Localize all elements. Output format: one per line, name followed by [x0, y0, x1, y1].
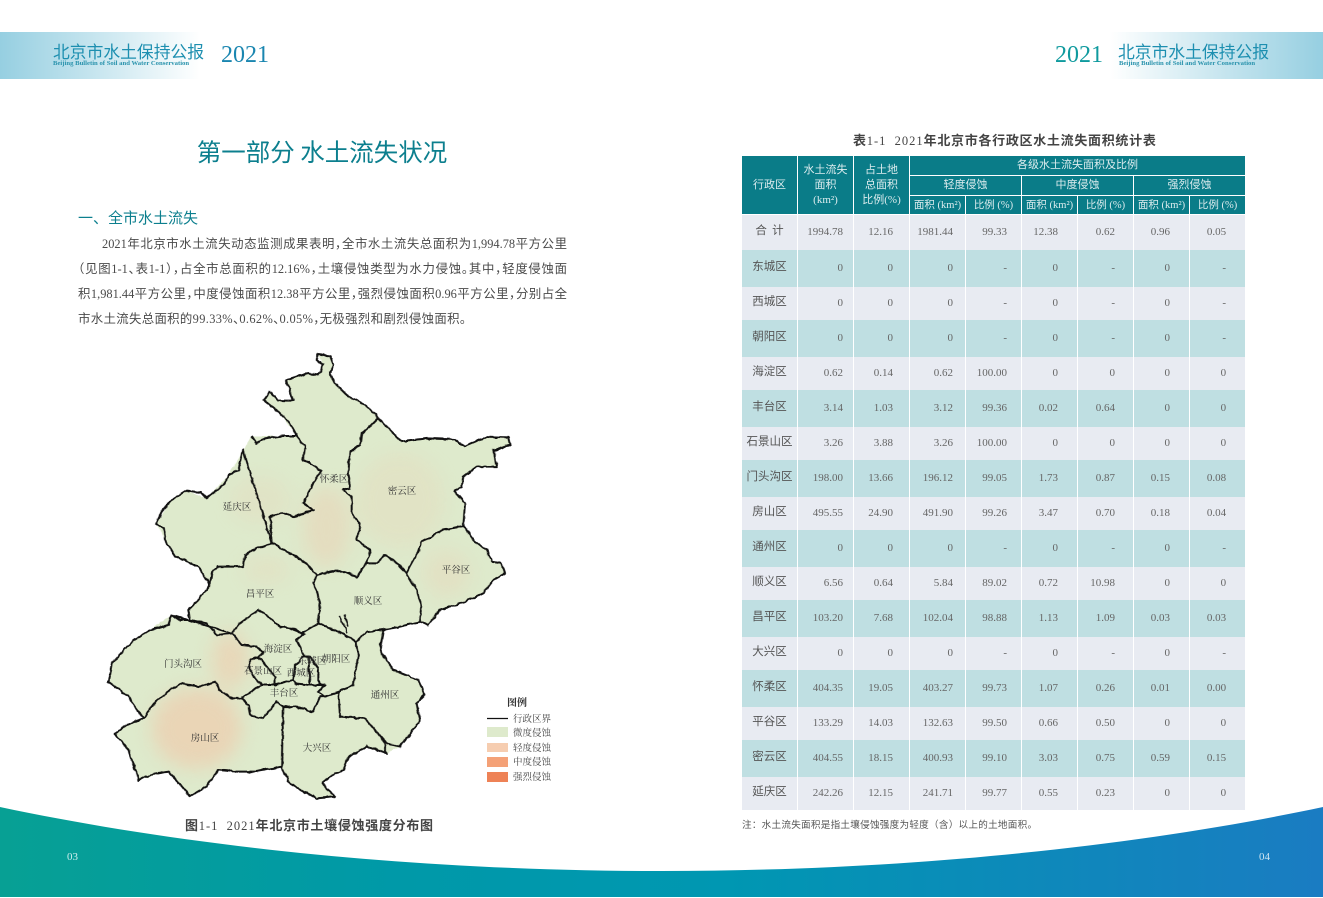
table body: 0 — [1221, 716, 1226, 728]
table body: 495.55 — [813, 506, 843, 518]
bottom wave — [0, 807, 1323, 897]
table body: 0 — [838, 262, 843, 274]
district labels: 房山区 — [191, 730, 220, 744]
table body: 合 计 — [755, 222, 784, 238]
district areas and boundaries — [106, 352, 512, 800]
table body: 0 — [948, 262, 953, 274]
table body: 99.77 — [982, 786, 1007, 798]
table header: 面积 (km²) — [1026, 200, 1073, 210]
map legend: 强烈侵蚀 — [513, 769, 552, 783]
table body: 5.84 — [934, 576, 953, 588]
table header: 面积 (km²) — [1138, 200, 1185, 210]
table body: 102.04 — [923, 612, 953, 624]
table body: 14.03 — [868, 716, 893, 728]
table body: 3.47 — [1039, 506, 1058, 518]
table body: 0 — [1221, 436, 1226, 448]
table body: 99.33 — [982, 226, 1007, 238]
right header subtitle: Beijing Bulletin of Soil and Water Conservation — [1119, 60, 1255, 67]
table body: 0 — [1052, 332, 1058, 344]
table body: 7.68 — [874, 612, 893, 624]
table body: 98.88 — [982, 612, 1007, 624]
table body: - — [1111, 262, 1115, 274]
table body: 3.14 — [824, 402, 843, 414]
table body: 12.38 — [1033, 226, 1058, 238]
body paragraph: （见图1-1、表1-1），占全市总面积的12.16%，土壤侵蚀类型为水力侵蚀。其中，轻度侵蚀面 — [72, 262, 567, 276]
table body: 0 — [948, 296, 953, 308]
table body: 0 — [1164, 646, 1170, 658]
table caption: 表1-1 2021年北京市各行政区水土流失面积统计表 — [853, 130, 1157, 149]
table header: 面积 (km²) — [914, 200, 961, 210]
table body: 怀柔区 — [752, 678, 787, 694]
table body: 朝阳区 — [752, 328, 787, 344]
table body: - — [1222, 296, 1226, 308]
body paragraph: 2021年北京市水土流失动态监测成果表明，全市水土流失总面积为1,994.78平方公里 — [102, 237, 567, 251]
map legend — [487, 694, 552, 783]
table body: 1.07 — [1039, 682, 1058, 694]
table body: 0 — [838, 646, 843, 658]
table header: 行政区 — [753, 178, 786, 190]
district labels: 大兴区 — [303, 740, 332, 754]
table body: 0.23 — [1096, 786, 1115, 798]
table body: 1.73 — [1039, 472, 1058, 484]
table body: 400.93 — [923, 752, 953, 764]
table body: 0.62 — [934, 366, 953, 378]
table body: 0 — [948, 542, 953, 554]
table body: 1.03 — [874, 402, 893, 414]
district boundaries — [108, 354, 510, 798]
district labels: 石景山区 — [244, 663, 282, 677]
table body: 海淀区 — [752, 362, 787, 378]
table body: 西城区 — [752, 292, 787, 308]
table note: 注：水土流失面积是指土壤侵蚀强度为轻度（含）以上的土地面积。 — [742, 817, 1037, 831]
table body: 密云区 — [752, 748, 787, 764]
table body: - — [1222, 332, 1226, 344]
table header: 比例 (%) — [1198, 200, 1237, 210]
table body: 0 — [1164, 296, 1170, 308]
body paragraph — [72, 237, 567, 326]
left header year: 2021 — [221, 42, 269, 68]
body paragraph: 积1,981.44平方公里，中度侵蚀面积12.38平方公里，强烈侵蚀面积0.96平方公里，分别占全 — [78, 287, 567, 301]
table body: 顺义区 — [752, 572, 787, 588]
left header title: 北京市水土保持公报 — [53, 39, 204, 63]
table body: 0.02 — [1039, 402, 1058, 414]
table body: 0.87 — [1096, 472, 1115, 484]
page number left: 03 — [67, 851, 78, 863]
table body: - — [1222, 262, 1226, 274]
body paragraph: 市水土流失总面积的99.33%、0.62%、0.05%，无极强烈和剧烈侵蚀面积。 — [78, 312, 473, 326]
table header: 面积 — [814, 178, 836, 190]
table header: 比例 (%) — [974, 200, 1013, 210]
table body: 0 — [1164, 436, 1170, 448]
table body: 0 — [1110, 436, 1115, 448]
table body: 0.70 — [1096, 506, 1115, 518]
table body: 0 — [1052, 542, 1058, 554]
table body: 0.14 — [874, 366, 893, 378]
table body: 0.05 — [1207, 226, 1226, 238]
subsection heading: 一、全市水土流失 — [78, 207, 198, 228]
district labels: 朝阳区 — [322, 651, 351, 665]
map legend: 行政区界 — [513, 711, 552, 725]
table body: 1994.78 — [807, 226, 843, 238]
table body: 0 — [888, 332, 893, 344]
table body: 1.13 — [1039, 612, 1058, 624]
table body: 3.26 — [824, 436, 843, 448]
table header: (km²) — [813, 194, 838, 206]
table body: 100.00 — [977, 366, 1007, 378]
table body: 0.01 — [1151, 682, 1170, 694]
table body: 0 — [1164, 542, 1170, 554]
erosion texture — [109, 355, 510, 798]
table header: 比例 (%) — [1086, 200, 1125, 210]
table body: 24.90 — [868, 506, 893, 518]
table body: 0.96 — [1151, 226, 1170, 238]
table body: 通州区 — [752, 538, 787, 554]
table body: 大兴区 — [752, 642, 787, 658]
table body: 0.59 — [1151, 752, 1170, 764]
table body: 0 — [948, 646, 953, 658]
district labels: 西城区 — [287, 665, 316, 679]
table body: 89.02 — [982, 576, 1007, 588]
right header year: 2021 — [1055, 42, 1103, 68]
table body: 0 — [1164, 716, 1170, 728]
table body: 0.66 — [1039, 716, 1058, 728]
district labels: 东城区 — [298, 653, 327, 667]
table body: 491.90 — [923, 506, 953, 518]
table body: 0.15 — [1207, 752, 1226, 764]
table body: 石景山区 — [746, 432, 792, 448]
table body: 198.00 — [813, 472, 843, 484]
map legend: 微度侵蚀 — [513, 725, 552, 739]
table body: 0 — [1052, 646, 1058, 658]
table body: 0 — [888, 646, 893, 658]
table body: 133.29 — [813, 716, 843, 728]
table body: 0 — [1110, 366, 1115, 378]
table body: 3.26 — [934, 436, 953, 448]
table body: 3.03 — [1039, 752, 1058, 764]
table body: 0 — [1164, 402, 1170, 414]
table body: 0 — [1221, 366, 1226, 378]
data table — [742, 156, 1245, 810]
table body: 0.72 — [1039, 576, 1058, 588]
district labels: 顺义区 — [354, 593, 383, 607]
table body: 13.66 — [868, 472, 893, 484]
table body: - — [1003, 332, 1007, 344]
table body: 0 — [1052, 262, 1058, 274]
table body: 242.26 — [813, 786, 843, 798]
table body: 0 — [1221, 786, 1226, 798]
figure caption: 图1-1 2021年北京市土壤侵蚀强度分布图 — [185, 815, 434, 834]
table header: 强烈侵蚀 — [1168, 179, 1212, 191]
table body: 241.71 — [923, 786, 953, 798]
table body: 0.18 — [1151, 506, 1170, 518]
map: soil erosion intensity — [5, 352, 1300, 871]
table body: 0.64 — [874, 576, 893, 588]
table body: 3.88 — [874, 436, 893, 448]
table body: 100.00 — [977, 436, 1007, 448]
table body: 延庆区 — [752, 782, 787, 798]
table body: 平谷区 — [752, 712, 787, 728]
table body: 10.98 — [1090, 576, 1115, 588]
left header subtitle: Beijing Bulletin of Soil and Water Conservation — [53, 60, 189, 67]
table body: 丰台区 — [752, 398, 787, 414]
table body: 0 — [888, 262, 893, 274]
table body: 18.15 — [868, 752, 893, 764]
table body: 东城区 — [752, 258, 787, 274]
table body: 0.75 — [1096, 752, 1115, 764]
table body: 0.64 — [1096, 402, 1115, 414]
table header: 轻度侵蚀 — [944, 179, 988, 191]
map legend: 中度侵蚀 — [513, 754, 552, 768]
table header: 中度侵蚀 — [1056, 179, 1100, 191]
table body: - — [1222, 646, 1226, 658]
table body: 0.62 — [824, 366, 843, 378]
table header: 各级水土流失面积及比例 — [1017, 159, 1138, 171]
table header: 占土地 — [865, 164, 898, 176]
table body: 0.62 — [1096, 226, 1115, 238]
table body: 0 — [838, 542, 843, 554]
table body: - — [1003, 646, 1007, 658]
table body: - — [1222, 542, 1226, 554]
table body: 99.05 — [982, 472, 1007, 484]
table body: 1981.44 — [917, 226, 953, 238]
table body: 0.03 — [1207, 612, 1226, 624]
table body: 99.26 — [982, 506, 1007, 518]
table body: 0 — [1164, 262, 1170, 274]
table body: 99.73 — [982, 682, 1007, 694]
table body: 0.50 — [1096, 716, 1115, 728]
map legend: 图例 — [507, 694, 527, 709]
table body: 房山区 — [752, 502, 787, 518]
table body: 0 — [1221, 402, 1226, 414]
table body: 0.15 — [1151, 472, 1170, 484]
table header: 总面积 — [865, 178, 898, 190]
table body: 0 — [1221, 576, 1226, 588]
table body: 404.35 — [813, 682, 843, 694]
table body: 0 — [1164, 576, 1170, 588]
district labels: 通州区 — [371, 687, 400, 701]
header band right — [1110, 32, 1323, 79]
table body: 昌平区 — [752, 608, 787, 624]
table body: - — [1111, 542, 1115, 554]
district labels: 怀柔区 — [320, 471, 349, 485]
table body: 0 — [1052, 296, 1058, 308]
table body: - — [1003, 542, 1007, 554]
table body: 0 — [1164, 332, 1170, 344]
district labels: 海淀区 — [264, 641, 293, 655]
table body: 0 — [1164, 786, 1170, 798]
table body: - — [1111, 332, 1115, 344]
table body: 99.10 — [982, 752, 1007, 764]
table header — [742, 156, 1245, 214]
table body: 0.03 — [1151, 612, 1170, 624]
table body: 0 — [1164, 366, 1170, 378]
table body: 0.55 — [1039, 786, 1058, 798]
table body: 0.00 — [1207, 682, 1226, 694]
table body: 0 — [888, 296, 893, 308]
table body: 0.26 — [1096, 682, 1115, 694]
table body: - — [1003, 262, 1007, 274]
district labels: 平谷区 — [442, 562, 471, 576]
table body: 1.09 — [1096, 612, 1115, 624]
page number right: 04 — [1259, 851, 1270, 863]
table body: 0.08 — [1207, 472, 1226, 484]
table body: - — [1111, 646, 1115, 658]
table body: 0 — [1052, 436, 1058, 448]
district labels: 丰台区 — [270, 685, 299, 699]
table body: 103.20 — [813, 612, 843, 624]
district labels: 密云区 — [388, 483, 417, 497]
table body: 19.05 — [868, 682, 893, 694]
table body: 0.04 — [1207, 506, 1226, 518]
header band left — [0, 32, 200, 79]
table body: 99.50 — [982, 716, 1007, 728]
section title: 第一部分 水土流失状况 — [197, 134, 447, 169]
table body: 99.36 — [982, 402, 1007, 414]
table body: 0 — [888, 542, 893, 554]
right header title: 北京市水土保持公报 — [1118, 39, 1269, 63]
table body: - — [1111, 296, 1115, 308]
table header: 比例(%) — [862, 194, 901, 206]
district labels: 昌平区 — [246, 586, 275, 600]
table body: 0 — [838, 332, 843, 344]
map legend: 轻度侵蚀 — [513, 740, 552, 754]
table body: 12.15 — [868, 786, 893, 798]
table body: 6.56 — [824, 576, 843, 588]
table body: 404.55 — [813, 752, 843, 764]
table header: 水土流失 — [804, 164, 848, 176]
table body: 12.16 — [868, 226, 893, 238]
table body: - — [1003, 296, 1007, 308]
table body: 132.63 — [923, 716, 953, 728]
table body: 0 — [1052, 366, 1058, 378]
table body — [742, 215, 1245, 810]
table body: 0 — [948, 332, 953, 344]
table body: 403.27 — [923, 682, 953, 694]
river detail — [339, 615, 348, 633]
table body: 门头沟区 — [746, 468, 792, 484]
district labels — [164, 471, 471, 754]
district labels: 延庆区 — [223, 499, 252, 513]
table body: 196.12 — [923, 472, 953, 484]
table body: 3.12 — [934, 402, 953, 414]
district labels: 门头沟区 — [164, 656, 202, 670]
table body: 0 — [838, 296, 843, 308]
